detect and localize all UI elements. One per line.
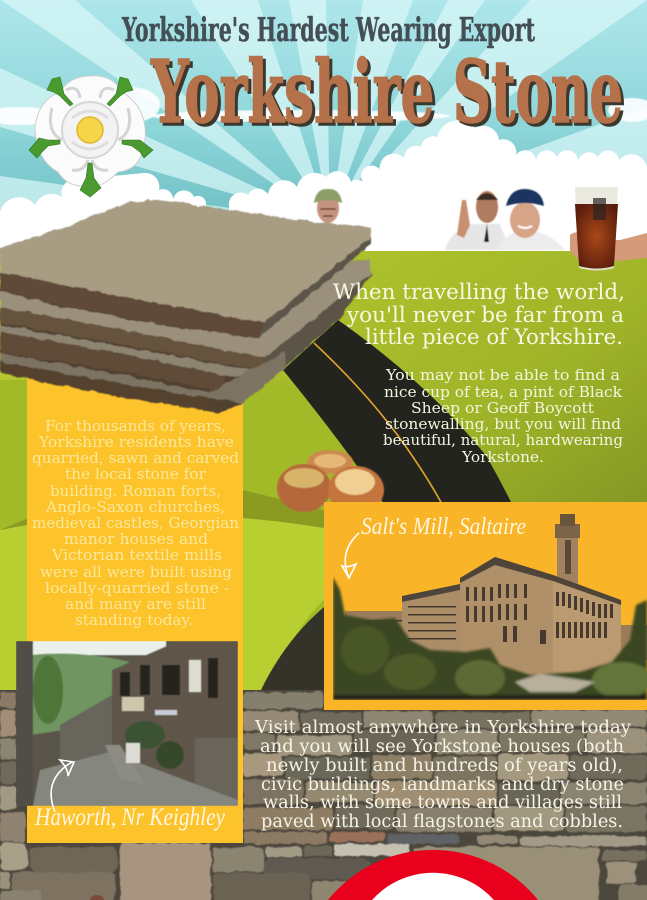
caption: Salt's Mill: Salt's Mill, Saltaire <box>361 514 526 540</box>
text block: visit almost anywhere: newly built and hundreds of years old), <box>266 756 623 776</box>
heading: when travelling: you'll never be far from a <box>346 303 624 327</box>
text block: you may not: stonewalling, but you will find <box>385 415 621 433</box>
stone slabs <box>0 200 371 413</box>
text block: for thousands of years: manor houses and <box>64 530 208 548</box>
slab 4 upper surface <box>0 352 285 403</box>
petals <box>35 76 145 187</box>
person: farmer peering over slab <box>314 189 342 223</box>
text block: visit almost anywhere <box>254 718 631 832</box>
text block: for thousands of years: were all were built using <box>40 563 232 581</box>
trees <box>333 577 647 700</box>
text block: for thousands of years: the local stone for <box>65 465 207 483</box>
sepals <box>29 77 153 197</box>
icon: head at bottom edge <box>90 895 104 900</box>
text block: you may not: Yorkstone. <box>461 448 544 466</box>
centre <box>77 117 103 143</box>
slab 2 side <box>262 274 371 380</box>
photo: Haworth street <box>16 641 238 806</box>
background haze clouds <box>0 87 647 125</box>
person: Geoff Boycott in cap <box>498 189 565 250</box>
heading: when travelling: little piece of Yorkshire. <box>365 325 623 349</box>
green field <box>0 251 647 701</box>
text block: for thousands of years: quarried, sawn and carved <box>32 449 239 467</box>
icon: yorkshire puddings <box>277 450 384 514</box>
slab 3 front <box>0 332 225 392</box>
icon: hand holding pint of beer <box>570 187 647 270</box>
title <box>121 10 626 146</box>
text block: for thousands of years: Yorkshire residents have <box>38 433 234 451</box>
heading: when travelling: When travelling the world, <box>333 280 625 304</box>
icon: yorkshire rose <box>29 76 153 197</box>
arrow: to Haworth <box>51 760 74 812</box>
text block: for thousands of years: For thousands of years, <box>45 417 226 435</box>
text block: for thousands of years: locally-quarried stone - <box>45 579 229 597</box>
text block: visit almost anywhere: paved with local flagstones and cobbles. <box>261 812 623 832</box>
arrow: to Salt's Mill <box>342 533 359 578</box>
person: cricket umpire <box>445 191 510 250</box>
London Underground roundel <box>328 850 538 900</box>
mill tower <box>555 514 580 585</box>
text block: visit almost anywhere: Visit almost anywhere in Yorkshire today <box>254 718 631 738</box>
road <box>260 320 512 692</box>
text block: for thousands of years: and many are still <box>65 595 206 613</box>
slab 3 upper surface <box>0 325 262 377</box>
clouds <box>0 120 647 260</box>
text block: you may not: beautiful, natural, hardwearing <box>383 431 623 449</box>
slab 1 top surface <box>0 200 371 323</box>
stack silhouette <box>0 200 371 413</box>
text block: you may not: nice cup of tea, a pint of Black <box>384 383 623 401</box>
stone wall <box>0 688 647 900</box>
text block: you may not <box>383 366 623 466</box>
text block: visit almost anywhere: and you will see Yorkstone houses (both <box>260 737 624 757</box>
mill building <box>345 557 647 680</box>
panel: Salt's Mill <box>324 502 647 710</box>
text block: visit almost anywhere: walls, with some towns and villages still <box>263 793 622 813</box>
sky background with sunburst <box>0 0 647 260</box>
text block: for thousands of years: Anglo-Saxon churches, <box>45 498 225 516</box>
text block: you may not: Sheep or Geoff Boycott <box>411 399 594 417</box>
slab 2 upper surface <box>0 260 371 358</box>
panel: quarried stone text background <box>27 375 243 843</box>
caption: Haworth: Haworth, Nr Keighley <box>34 804 226 831</box>
photo: Salt's Mill <box>333 514 647 700</box>
heading: when travelling <box>333 280 625 349</box>
text block: for thousands of years: Victorian textile mills <box>51 546 222 564</box>
text block: visit almost anywhere: civic buildings, landmarks and dry stone <box>261 775 624 795</box>
slab 4 front <box>0 362 219 413</box>
text block: for thousands of years: standing today. <box>75 611 193 629</box>
slab 2 front <box>0 307 264 371</box>
text block: for thousands of years <box>32 417 239 629</box>
text block: for thousands of years: medieval castles, Georgian <box>32 514 239 532</box>
text block: you may not: You may not be able to find a <box>385 366 620 384</box>
text block: for thousands of years: building. Roman forts, <box>50 482 221 500</box>
